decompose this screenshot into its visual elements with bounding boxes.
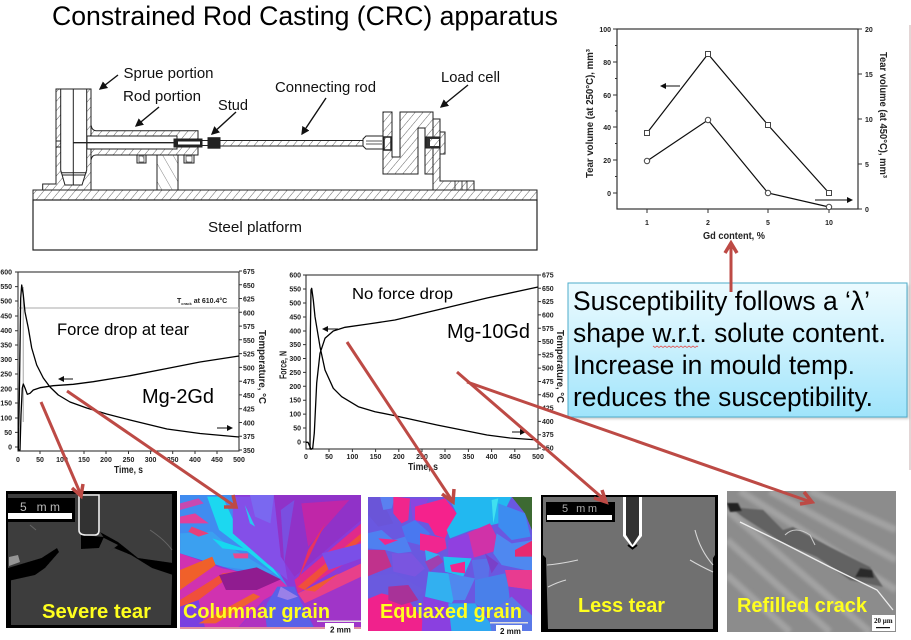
red arrow: to refilled crack	[467, 382, 812, 504]
x axis numbers	[16, 457, 245, 464]
diagram labels: Sprue portion	[124, 66, 214, 82]
x axis numbers: 250	[416, 454, 428, 461]
chart: Mg-2Gd force and temperature: Time, s	[114, 465, 143, 476]
chart: Mg-10Gd force and temperature: Temperature, °C	[554, 330, 565, 403]
diagram labels: Connecting rod	[275, 80, 376, 96]
curve arrows	[323, 329, 525, 432]
left axis numbers: 600	[0, 270, 12, 276]
right axis numbers: 675	[243, 269, 255, 276]
chart: tear volume vs Gd content	[585, 27, 888, 242]
micrograph: columnar grain: 2 mm	[330, 626, 351, 634]
x axis numbers: 350	[167, 457, 179, 464]
x axis numbers: 10	[825, 220, 833, 227]
x axis numbers: 200	[100, 457, 112, 464]
micrograph: equiaxed grain: Equiaxed grain	[380, 601, 522, 623]
right axis numbers: 575	[542, 326, 554, 333]
callout: susceptibility: Susceptibility follows a ‘λ’	[573, 286, 870, 316]
left axis numbers: 0	[607, 191, 611, 198]
right axis numbers: 450	[243, 393, 255, 400]
right axis numbers: 400	[542, 419, 554, 426]
x axis numbers: 1	[645, 220, 649, 227]
right axis numbers: 350	[542, 446, 554, 452]
right axis numbers: 375	[243, 434, 255, 441]
left axis numbers: 250	[289, 370, 301, 377]
left axis numbers: 50	[293, 426, 301, 432]
left axis numbers	[599, 27, 611, 198]
left axis numbers	[289, 272, 301, 446]
left axis numbers: 300	[289, 356, 301, 363]
diagram labels: Load cell	[441, 70, 500, 86]
right axis numbers: 500	[243, 366, 255, 372]
left axis numbers: 0	[8, 444, 12, 452]
title: Constrained Rod Casting (CRC) apparatus	[52, 1, 558, 31]
rod portion	[73, 125, 198, 190]
left axis numbers: 250	[0, 372, 12, 378]
right axis numbers: 625	[243, 296, 255, 304]
micrograph: less tear: Less tear	[578, 595, 665, 617]
x axis numbers: 400	[189, 457, 201, 464]
axis titles: Force, N	[278, 351, 290, 379]
right axis numbers: 15	[865, 72, 873, 79]
left axis numbers: 200	[0, 386, 12, 394]
chart: Mg-2Gd force and temperature: at 610.4°C	[192, 297, 227, 305]
right axis numbers: 675	[542, 272, 554, 280]
annotation: force drop at tear: Force drop at tear	[57, 320, 189, 339]
right axis numbers: 425	[243, 406, 255, 414]
x axis numbers	[645, 220, 833, 227]
x axis numbers: 150	[78, 457, 90, 464]
sprue portion	[43, 89, 91, 190]
x axis numbers: 50	[325, 454, 333, 461]
x axis numbers: 50	[36, 457, 44, 464]
left axis numbers: 350	[289, 342, 301, 349]
x axis numbers: 0	[304, 454, 308, 461]
x axis numbers: 400	[486, 454, 498, 461]
steel platform	[33, 190, 537, 250]
micrograph: severe tear	[6, 491, 177, 628]
right axis numbers: 425	[542, 406, 554, 412]
temperature curve	[310, 288, 538, 449]
micrograph: refilled crack: Refilled crack	[737, 595, 868, 617]
right axis numbers: 600	[243, 310, 255, 318]
axis titles: Temperature, °C	[256, 330, 267, 404]
x axis numbers: 350	[463, 454, 474, 461]
micrograph: refilled crack	[727, 491, 896, 632]
right axis numbers: 0	[865, 207, 869, 214]
left axis numbers: 600	[289, 272, 301, 280]
chart: tear volume vs Gd content: Tear volume (at 450°C), mm³	[877, 52, 888, 179]
right axis numbers: 350	[243, 448, 255, 455]
left axis numbers: 400	[0, 328, 12, 335]
axis titles: Tear volume (at 250°C), mm³	[585, 48, 596, 178]
red arrow: to severe tear	[41, 402, 83, 496]
left axis numbers: 0	[297, 440, 301, 446]
micrograph: refilled crack: 20 μm	[874, 617, 893, 625]
right axis numbers: 500	[542, 366, 554, 372]
right axis numbers: 650	[542, 286, 554, 293]
right axis numbers: 20	[865, 27, 873, 34]
left axis numbers: 350	[0, 342, 12, 350]
right axis numbers	[865, 27, 873, 214]
chart: Mg-2Gd force and temperature: T	[177, 298, 181, 305]
right edge line	[909, 25, 911, 470]
connecting rod	[220, 136, 383, 149]
right axis numbers: 575	[243, 324, 255, 331]
diagram labels: Rod portion	[123, 89, 201, 105]
left axis numbers: 150	[0, 400, 12, 408]
micrograph: less tear	[541, 495, 718, 632]
force curve	[18, 356, 239, 450]
left axis numbers: 100	[289, 412, 301, 418]
right axis numbers: 5	[865, 162, 869, 169]
crack temperature line	[18, 287, 239, 422]
chart: Mg-2Gd force and temperature: crack	[181, 301, 193, 306]
right axis numbers: 625	[542, 299, 554, 306]
diagram labels: Stud	[218, 98, 248, 114]
left axis numbers: 500	[0, 298, 12, 306]
right axis numbers: 525	[542, 352, 554, 360]
red arrow: to equiaxed grain	[347, 342, 454, 502]
micrograph: columnar grain: Columnar grain	[183, 601, 330, 623]
right axis numbers: 550	[542, 339, 554, 346]
red arrow: to less tear	[457, 372, 606, 502]
right axis numbers: 650	[243, 283, 255, 290]
left axis numbers: 200	[289, 384, 301, 391]
circle series	[644, 117, 832, 210]
curve arrows	[59, 379, 232, 428]
x axis numbers: 450	[211, 457, 223, 464]
left axis numbers: 60	[603, 93, 611, 100]
left axis numbers: 100	[0, 416, 12, 422]
callout: susceptibility: shape w.r.t. solute content.	[573, 318, 886, 348]
left axis numbers: 450	[289, 314, 301, 322]
callout: susceptibility	[568, 283, 909, 419]
left axis numbers: 500	[289, 300, 301, 308]
annotation: Mg-10Gd: Mg-10Gd	[447, 321, 530, 343]
right axis numbers: 600	[542, 312, 554, 320]
left axis numbers: 80	[603, 60, 611, 67]
right axis numbers: 450	[542, 392, 554, 400]
right axis numbers	[542, 272, 554, 452]
left axis numbers	[0, 270, 12, 452]
right axis numbers: 475	[542, 379, 554, 386]
micrograph: severe tear: 5 mm	[20, 500, 60, 514]
series arrows	[661, 86, 852, 200]
x axis numbers: 500	[532, 454, 544, 461]
micrograph: severe tear: Severe tear	[42, 601, 151, 623]
callout: susceptibility: reduces the susceptibility.	[573, 382, 873, 412]
left axis numbers: 550	[0, 284, 12, 291]
chart: Mg-10Gd force and temperature: Time, s	[408, 462, 438, 473]
micrograph: less tear: 5 mm	[562, 503, 597, 515]
left axis numbers: 450	[0, 314, 12, 320]
micrograph: equiaxed grain: 2 mm	[500, 627, 521, 636]
chart: Mg-2Gd force and temperature	[0, 269, 267, 476]
x axis numbers	[304, 454, 544, 461]
left axis numbers: 50	[4, 430, 12, 437]
right axis numbers	[243, 269, 255, 455]
left axis numbers: 300	[0, 357, 12, 364]
left axis numbers: 400	[289, 328, 301, 336]
right axis numbers: 550	[243, 338, 255, 345]
stud	[174, 138, 220, 148]
x axis numbers: 100	[56, 457, 68, 464]
right axis numbers: 475	[243, 379, 255, 386]
chart: Mg-10Gd force and temperature	[278, 272, 565, 473]
callout: susceptibility: Increase in mould temp.	[573, 350, 855, 380]
x axis numbers: 450	[509, 454, 521, 461]
x axis numbers: 250	[123, 457, 134, 464]
x axis numbers: 300	[145, 457, 157, 464]
x axis numbers: 2	[706, 220, 710, 227]
red arrow: to columnar grain	[67, 391, 236, 507]
load cell	[383, 112, 474, 190]
diagram labels	[123, 66, 500, 236]
annotation: Mg-2Gd: Mg-2Gd	[142, 386, 214, 408]
micrograph: equiaxed grain	[365, 495, 533, 636]
diagram labels: Steel platform	[208, 220, 302, 236]
annotation: no force drop: No force drop	[352, 286, 453, 303]
x axis numbers: 300	[439, 454, 451, 461]
square series	[644, 52, 832, 196]
micrograph: columnar grain	[178, 493, 363, 634]
temperature curve	[18, 285, 239, 450]
right axis numbers: 400	[243, 420, 255, 428]
right axis numbers: 525	[243, 352, 255, 358]
x axis numbers: 5	[766, 220, 770, 227]
apparatus diagram	[33, 89, 537, 250]
diagram pointer arrows	[100, 75, 468, 134]
x axis numbers: 200	[393, 454, 405, 461]
chart: tear volume vs Gd content: Gd content, %	[703, 231, 765, 242]
x axis numbers: 500	[233, 457, 245, 464]
x axis numbers: 100	[347, 454, 358, 461]
x axis numbers: 150	[370, 454, 382, 461]
left axis numbers: 40	[603, 125, 611, 132]
red arrow: callout to tear volume chart	[725, 243, 737, 292]
left axis numbers: 150	[289, 398, 301, 404]
right axis numbers: 10	[865, 117, 873, 124]
right axis numbers: 375	[542, 432, 554, 439]
left axis numbers: 20	[603, 158, 611, 165]
force curve	[306, 287, 538, 449]
left axis numbers: 550	[289, 286, 301, 294]
left axis numbers: 100	[599, 27, 611, 34]
x axis numbers: 0	[16, 457, 20, 464]
